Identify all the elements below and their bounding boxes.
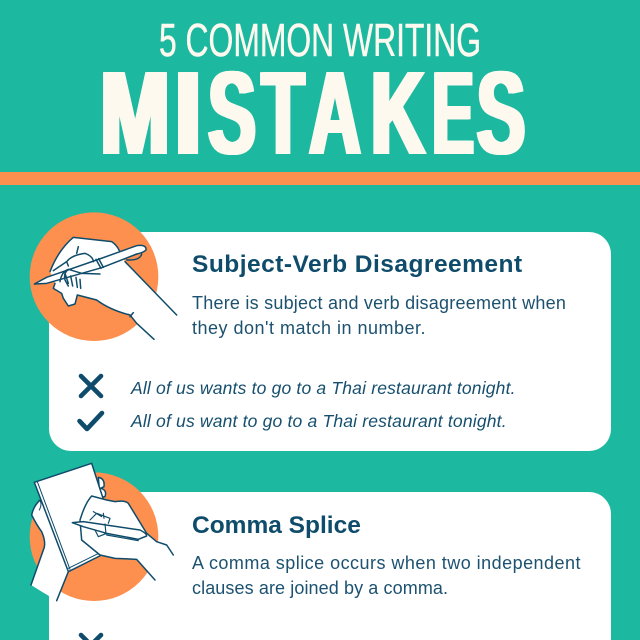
description text xyxy=(192,293,566,338)
panel: comma splice xyxy=(49,492,611,640)
title line: mistakes: T xyxy=(261,47,304,180)
correct example: All of us want to go to a Thai restaurant tonight. xyxy=(131,411,507,431)
description text: clauses are joined by a comma. xyxy=(192,578,448,598)
panel: subject-verb disagreement xyxy=(49,232,611,451)
heading: Subject-Verb Disagreement xyxy=(192,251,523,278)
icon: hand writing with pen xyxy=(30,212,178,341)
icon: check xyxy=(77,410,104,432)
title line: mistakes: S xyxy=(208,47,255,180)
card background xyxy=(49,232,611,451)
title line: mistakes xyxy=(100,47,525,180)
title line: mistakes: E xyxy=(431,47,474,180)
description text: A comma splice occurs when two independent xyxy=(192,553,581,573)
description text: There is subject and verb disagreement when xyxy=(192,293,566,313)
orange divider band xyxy=(0,172,640,185)
title line: mistakes: K xyxy=(371,47,425,180)
icon: hand writing in notebook xyxy=(30,462,174,602)
description text: they don't match in number. xyxy=(192,318,426,338)
icon: cross xyxy=(78,374,104,398)
title line: mistakes: A xyxy=(309,47,360,180)
icon: cross, second panel xyxy=(78,632,104,640)
title line: mistakes: M xyxy=(100,47,169,180)
title line: mistakes: I xyxy=(175,47,201,180)
heading: Comma Splice xyxy=(192,512,361,539)
description text xyxy=(192,553,581,598)
title line: mistakes: S xyxy=(477,47,525,180)
incorrect example: All of us wants to go to a Thai restaurant tonight. xyxy=(131,378,516,398)
card background xyxy=(49,492,611,640)
